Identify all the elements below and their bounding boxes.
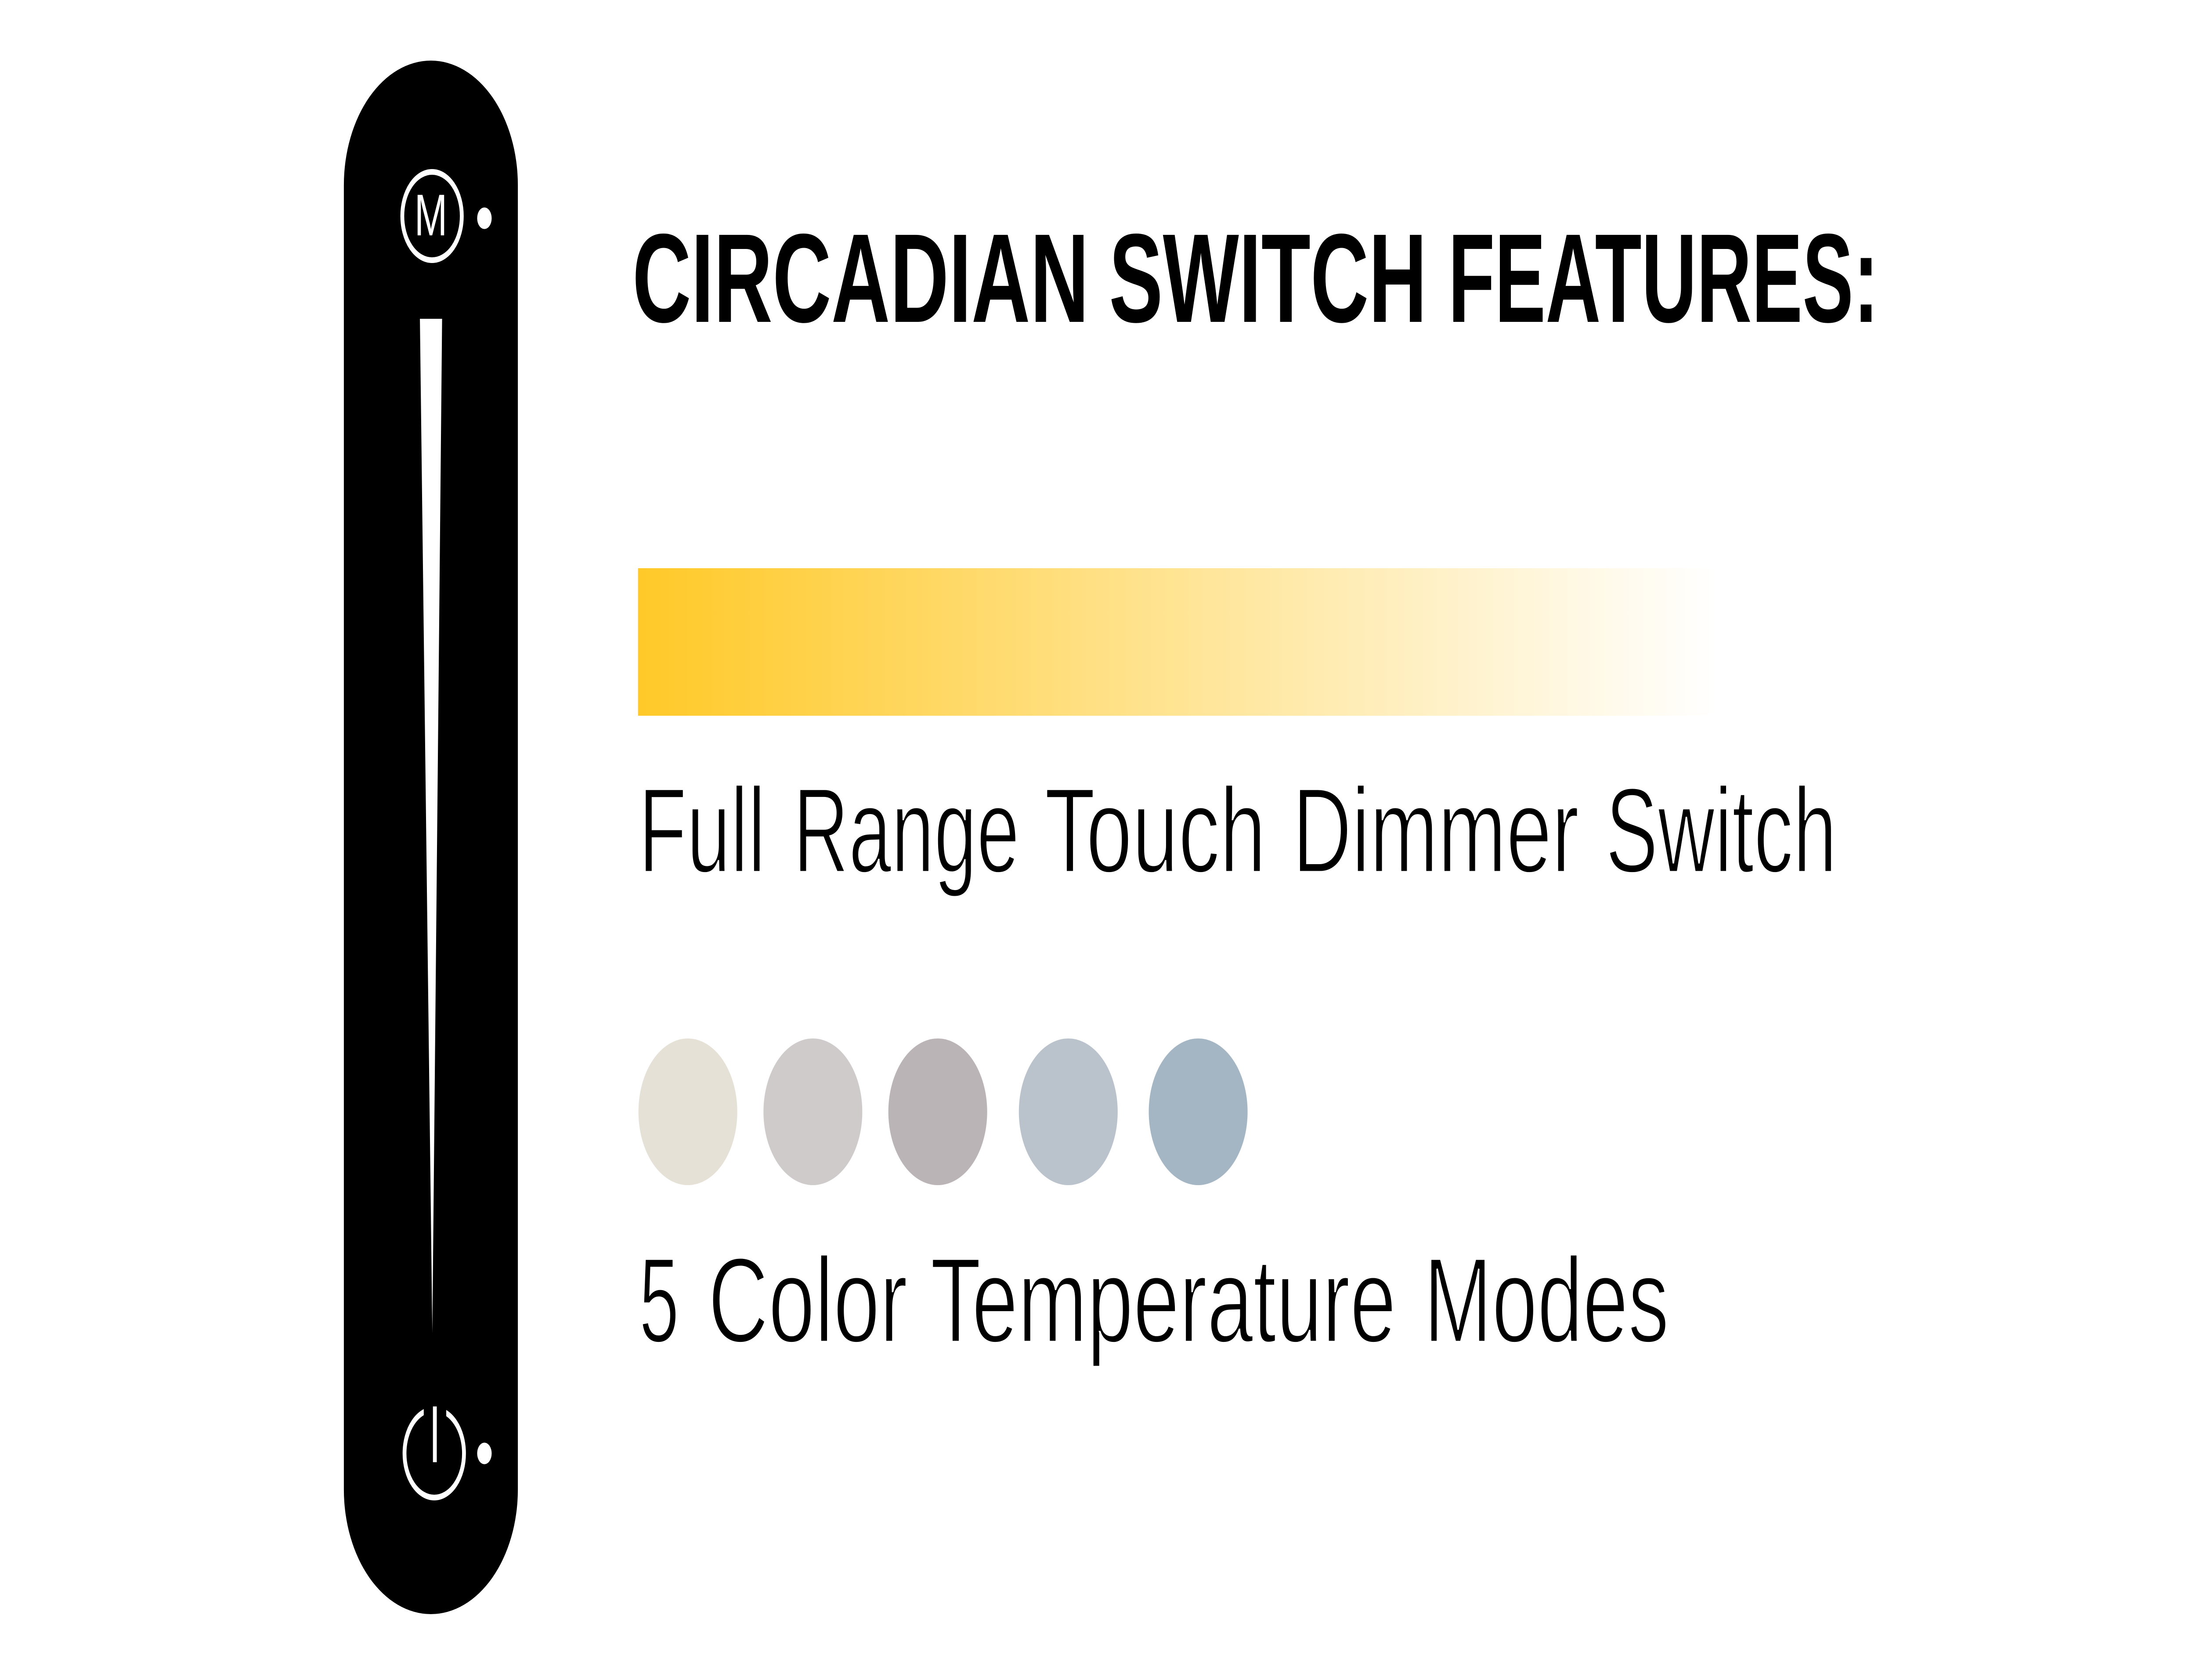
- swatch 3: [889, 1038, 987, 1185]
- icon: power button: [405, 1401, 464, 1497]
- text: dimmer feature: [639, 763, 1837, 898]
- switch body: [344, 61, 518, 1614]
- icon: mode indicator dot: [477, 207, 491, 229]
- icon: mode button: M: [414, 183, 448, 248]
- title: SWITCH: [1109, 208, 1427, 349]
- text: dimmer feature: Touch: [1044, 763, 1266, 898]
- text: dimmer feature: Full: [639, 763, 766, 898]
- text: color temperature feature: Temperature: [930, 1233, 1396, 1368]
- icon: mode button: [402, 172, 462, 260]
- text: color temperature feature: Color: [708, 1233, 907, 1368]
- text: color temperature feature: 5: [639, 1233, 679, 1368]
- title: CIRCADIAN: [632, 208, 1089, 349]
- swatch 2: [763, 1038, 862, 1185]
- text: dimmer feature: Switch: [1606, 763, 1837, 898]
- swatch 4: [1019, 1038, 1118, 1185]
- title: [632, 208, 1879, 349]
- text: dimmer feature: Range: [793, 763, 1019, 898]
- dimmer gradient bar: [638, 568, 1716, 716]
- icon: dimmer slider wedge: [420, 319, 442, 1333]
- text: color temperature feature: Modes: [1424, 1233, 1669, 1368]
- icon: power indicator dot: [477, 1443, 491, 1464]
- title: FEATURES:: [1448, 208, 1879, 349]
- swatch 5: [1149, 1038, 1248, 1185]
- color temperature swatches: [639, 1038, 1248, 1185]
- panel: touch switch: [344, 61, 518, 1614]
- text: color temperature feature: [639, 1233, 1669, 1368]
- text: dimmer feature: Dimmer: [1293, 763, 1579, 898]
- swatch 1: [639, 1038, 737, 1185]
